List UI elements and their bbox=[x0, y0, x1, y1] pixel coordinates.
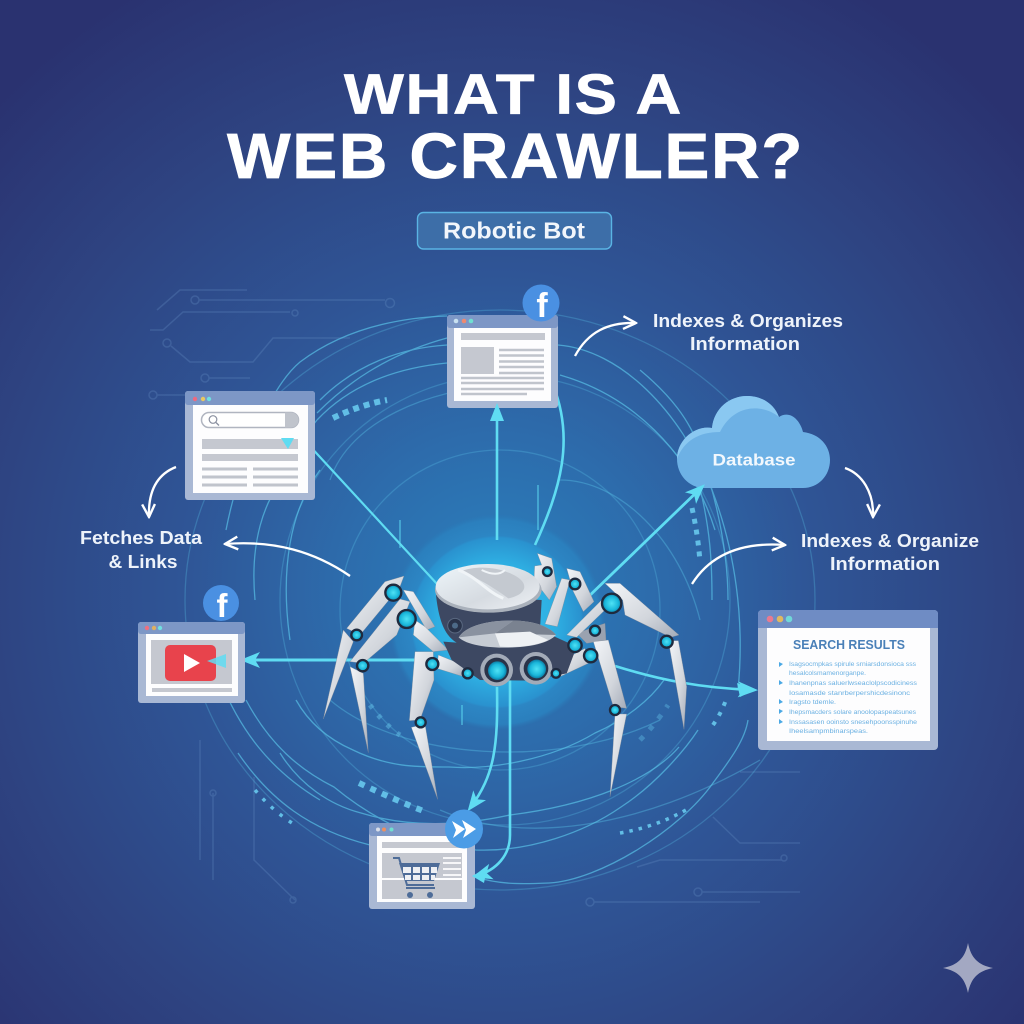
badge: Robotic Bot bbox=[418, 212, 612, 249]
second left leg bbox=[350, 599, 448, 753]
badge: Robotic Bot: Robotic Bot bbox=[443, 218, 585, 244]
eyes bbox=[480, 652, 552, 686]
panel: search page bbox=[185, 391, 315, 500]
side camera bbox=[448, 618, 462, 633]
panel: video page bbox=[138, 622, 245, 703]
panel: search results: Isagsocmpkas spirule srniarsdonsioca sss bbox=[789, 662, 916, 668]
label: indexes and organizes bbox=[653, 310, 843, 354]
label: fetches data bbox=[80, 527, 203, 572]
panel: search results: Iragsto tdemle. bbox=[789, 700, 836, 706]
icon: facebook badge left: f bbox=[216, 587, 228, 624]
panel: search results: Inssasasen ooinsto snesehpoonsspinuhe bbox=[789, 720, 918, 726]
panel: shopping page bbox=[369, 823, 475, 909]
label: indexes and organizes: Information bbox=[690, 333, 800, 354]
faint circuit pattern bbox=[149, 290, 800, 906]
label: indexes and organize bbox=[801, 530, 979, 574]
panel: search results: Iosamasde stanrberpershicdesinonc bbox=[789, 691, 910, 697]
front inner arms bbox=[437, 648, 588, 677]
label: indexes and organize: Indexes & Organize bbox=[801, 530, 979, 551]
panel: search results: SEARCH RESULTS bbox=[793, 638, 905, 652]
panel: search results: Iheelsampmbinarspeas. bbox=[789, 729, 868, 735]
arrow: into search results bbox=[737, 683, 754, 697]
icon: facebook badge top: f bbox=[536, 287, 548, 325]
title bbox=[227, 62, 804, 192]
panel: article page bbox=[447, 315, 558, 408]
arrow: up into article page bbox=[490, 403, 504, 421]
web rings bbox=[185, 310, 815, 890]
dome top bbox=[435, 564, 542, 613]
label: indexes and organize: Information bbox=[830, 553, 940, 574]
title: WEB CRAWLER? bbox=[227, 120, 804, 192]
label: fetches data: & Links bbox=[108, 551, 178, 572]
icon: cloud database bbox=[677, 396, 830, 488]
cyan data arrows bbox=[222, 385, 754, 876]
label: fetches data: Fetches Data bbox=[80, 527, 203, 548]
white process arrows bbox=[149, 323, 873, 584]
far left leg bbox=[323, 576, 435, 719]
leg joints bbox=[351, 567, 673, 727]
spider robot bbox=[323, 553, 687, 799]
arrow: up into database bbox=[585, 487, 702, 600]
dark body bbox=[436, 595, 577, 681]
label: indexes and organizes: Indexes & Organizes bbox=[653, 310, 843, 331]
front plate bbox=[459, 621, 556, 648]
icon: facebook badge left bbox=[203, 585, 239, 624]
panel: search results: Ihanenpnas saluerlwseaclolpscodiciness bbox=[789, 681, 917, 687]
dotted orbit arcs bbox=[255, 400, 727, 833]
far right leg bbox=[567, 583, 687, 729]
panel: search results bbox=[758, 610, 938, 750]
arrow: into shopping page bbox=[472, 868, 487, 883]
back legs bbox=[534, 553, 606, 643]
third left leg bbox=[409, 652, 438, 799]
icon: sparkle watermark bbox=[943, 943, 993, 993]
spider glow bbox=[389, 514, 605, 730]
title: WHAT IS A bbox=[344, 62, 683, 126]
third right leg bbox=[593, 640, 627, 797]
icon: facebook badge top bbox=[522, 284, 560, 325]
panel: search results: Ihepsmacders solare anoolopaspeatsunes bbox=[789, 710, 916, 716]
icon: cloud database: Database bbox=[712, 450, 796, 470]
icon: forward badge bbox=[445, 810, 483, 848]
panel: search results: hesalcolsmamenorganpe. bbox=[789, 671, 866, 677]
